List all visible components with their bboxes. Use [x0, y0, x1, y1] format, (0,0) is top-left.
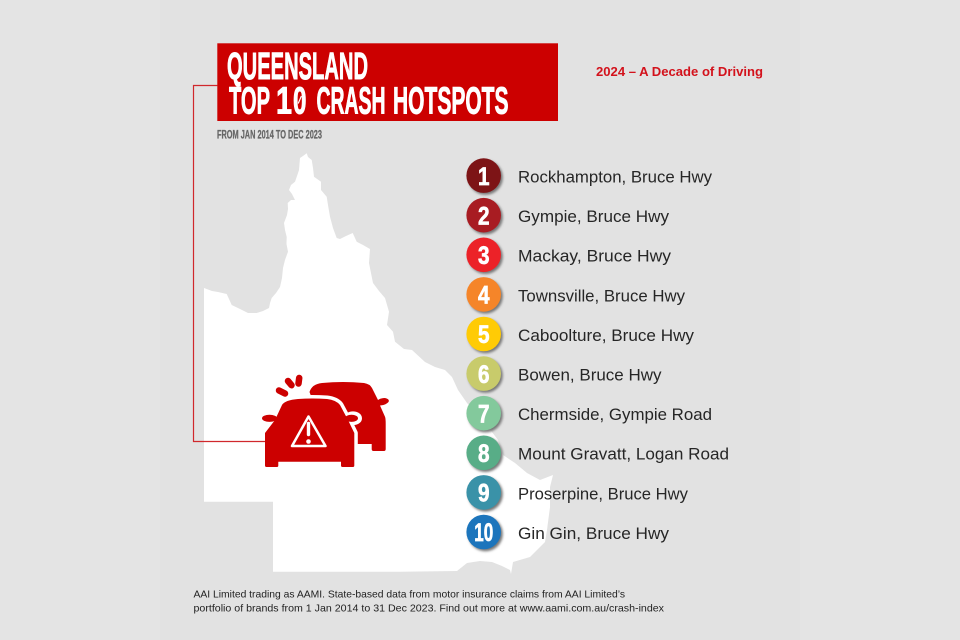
item 2: Gympie: [466, 198, 670, 234]
connector line from title to car icon: [194, 86, 265, 442]
alert rays: [279, 378, 299, 394]
item 6: Bowen: [466, 356, 662, 393]
item 10: Gin Gin: Gin Gin, Bruce Hwy: [518, 524, 670, 543]
item 4: Townsville: 4: [478, 282, 490, 310]
footnote: portfolio of brands from 1 Jan 2014 to 31 Dec 2023. Find out more at www.aami.com.au/crash-index: [194, 603, 665, 614]
item 1: Rockhampton: [466, 158, 712, 195]
item 1: Rockhampton: Rockhampton, Bruce Hwy: [518, 168, 712, 186]
item 3: Mackay: [466, 238, 672, 274]
warning triangle: [292, 416, 326, 446]
ranked list of hotspots: [466, 158, 729, 551]
title line 2: TOP: [229, 81, 270, 123]
item 8: Mount Gravatt: Mount Gravatt, Logan Road: [518, 445, 729, 464]
item 4: Townsville: [466, 277, 685, 314]
item 5: Caboolture: [466, 317, 694, 353]
item 3: Mackay: Mackay, Bruce Hwy: [518, 247, 672, 266]
item 9: Proserpine: Proserpine, Bruce Hwy: [518, 484, 688, 503]
footnote: [194, 590, 665, 614]
item 9: Proserpine: 9: [478, 480, 490, 508]
item 6: Bowen: Bowen, Bruce Hwy: [518, 366, 662, 384]
item 7: Chermside: Chermside, Gympie Road: [518, 405, 712, 424]
icon: two crashed cars with warning sign: [262, 378, 389, 467]
item 2: Gympie: 2: [478, 202, 490, 230]
map: Queensland silhouette: [204, 153, 553, 574]
back car: [310, 382, 389, 451]
item 10: Gin Gin: 10: [474, 519, 493, 547]
edition label: 2024 – A Decade of Driving: [596, 65, 763, 79]
item 7: Chermside: 7: [478, 400, 490, 428]
item 10: Gin Gin: [466, 515, 670, 551]
title line 2: HOTSPOTS: [393, 81, 508, 123]
item 4: Townsville: Townsville, Bruce Hwy: [518, 286, 685, 305]
title line 1: QUEENSLAND: [227, 46, 368, 88]
item 1: Rockhampton: 1: [478, 163, 490, 191]
title line 2: 0: [293, 81, 306, 123]
item 7: Chermside: [466, 396, 712, 432]
item 9: Proserpine: [466, 475, 688, 512]
title line 2: CRASH: [316, 81, 386, 123]
title line 2: 1: [276, 81, 292, 123]
title line 2: [229, 81, 508, 123]
item 2: Gympie: Gympie, Bruce Hwy: [518, 207, 670, 226]
item 8: Mount Gravatt: 8: [478, 440, 490, 468]
title banner: [217, 43, 558, 123]
subtitle: date range: FROM JAN 2014 TO DEC 2023: [217, 130, 322, 142]
footnote: AAI Limited trading as AAMI. State-based data from motor insurance claims from AAI Limited’s: [194, 590, 625, 600]
item 5: Caboolture: 5: [478, 321, 490, 349]
item 6: Bowen: 6: [478, 361, 490, 389]
front car: [262, 398, 358, 467]
item 3: Mackay: 3: [478, 242, 490, 270]
item 8: Mount Gravatt: [466, 436, 729, 472]
front car halo: [265, 398, 358, 467]
item 5: Caboolture: Caboolture, Bruce Hwy: [518, 326, 694, 345]
